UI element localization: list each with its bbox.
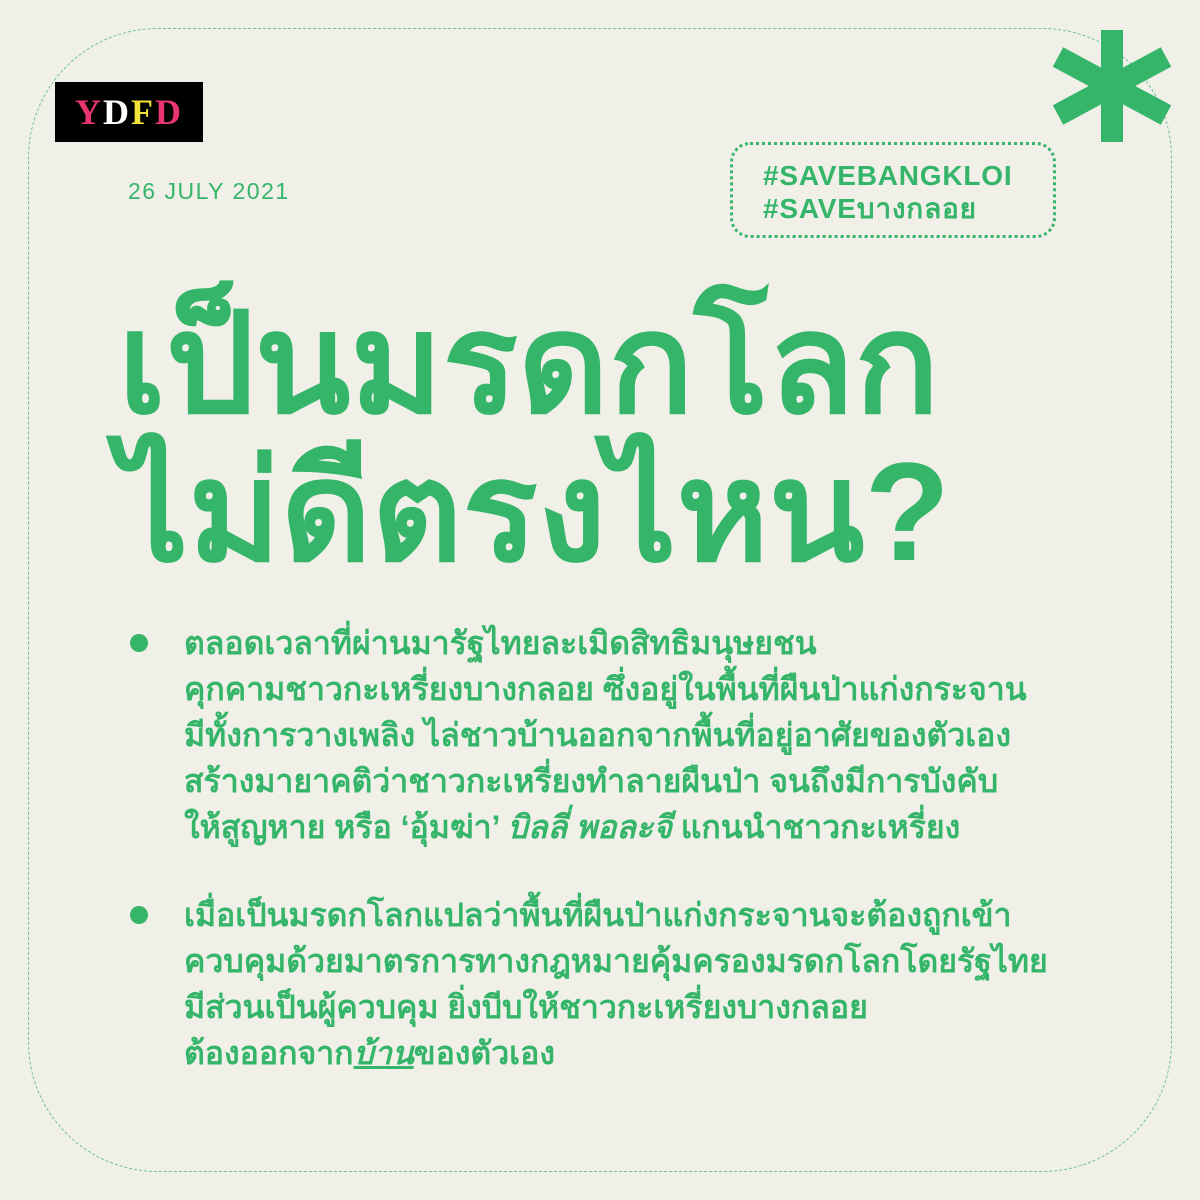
bullet 2: เมื่อเป็นมรดกโลกแปลว่าพื้นที่ผืนป่าแก่งกระจานจะต้องถูกเข้า [184,897,1012,933]
logo [55,82,203,142]
bullet 1: ให้สูญหาย หรือ ‘อุ้มฆ่า’ บิลลี่ พอละจี แกนนำชาวกะเหรี่ยง [184,809,960,845]
title: เป็นมรดกโลก [118,285,939,442]
bullet 2: ต้องออกจากบ้านของตัวเอง [184,1035,555,1071]
title: ไม่ดีตรงไหน? [118,433,950,590]
bullet 1: สร้างมายาคติว่าชาวกะเหรี่ยงทำลายผืนป่า จนถึงมีการบังคับ [184,763,998,799]
bullet 1: มีทั้งการวางเพลิง ไล่ชาวบ้านออกจากพื้นที่อยู่อาศัยของตัวเอง [184,717,1011,753]
hashtag box [730,142,1056,238]
bullet 1 [130,620,1027,847]
hashtag box: #SAVEบางกลอย [763,193,977,224]
bullet 2: มีส่วนเป็นผู้ควบคุม ยิ่งบีบให้ชาวกะเหรี่ยงบางกลอย [184,989,868,1025]
bullet 1: คุกคามชาวกะเหรี่ยงบางกลอย ซึ่งอยู่ในพื้นที่ผืนป่าแก่งกระจาน [184,671,1027,707]
logo: D [155,92,183,132]
logo: Y [75,92,103,132]
hashtag box: #SAVEBANGKLOI [763,160,1012,191]
title [106,280,950,590]
date: 26 JULY 2021 [128,178,290,204]
bullet 2: ควบคุมด้วยมาตรการทางกฎหมายคุ้มครองมรดกโลกโดยรัฐไทย [184,943,1048,979]
bullet 1: ตลอดเวลาที่ผ่านมารัฐไทยละเมิดสิทธิมนุษยชน [184,625,817,661]
icon: asterisk [1052,30,1172,142]
logo: F [131,92,155,132]
bullet 2 [130,892,1048,1071]
logo: D [103,92,131,132]
